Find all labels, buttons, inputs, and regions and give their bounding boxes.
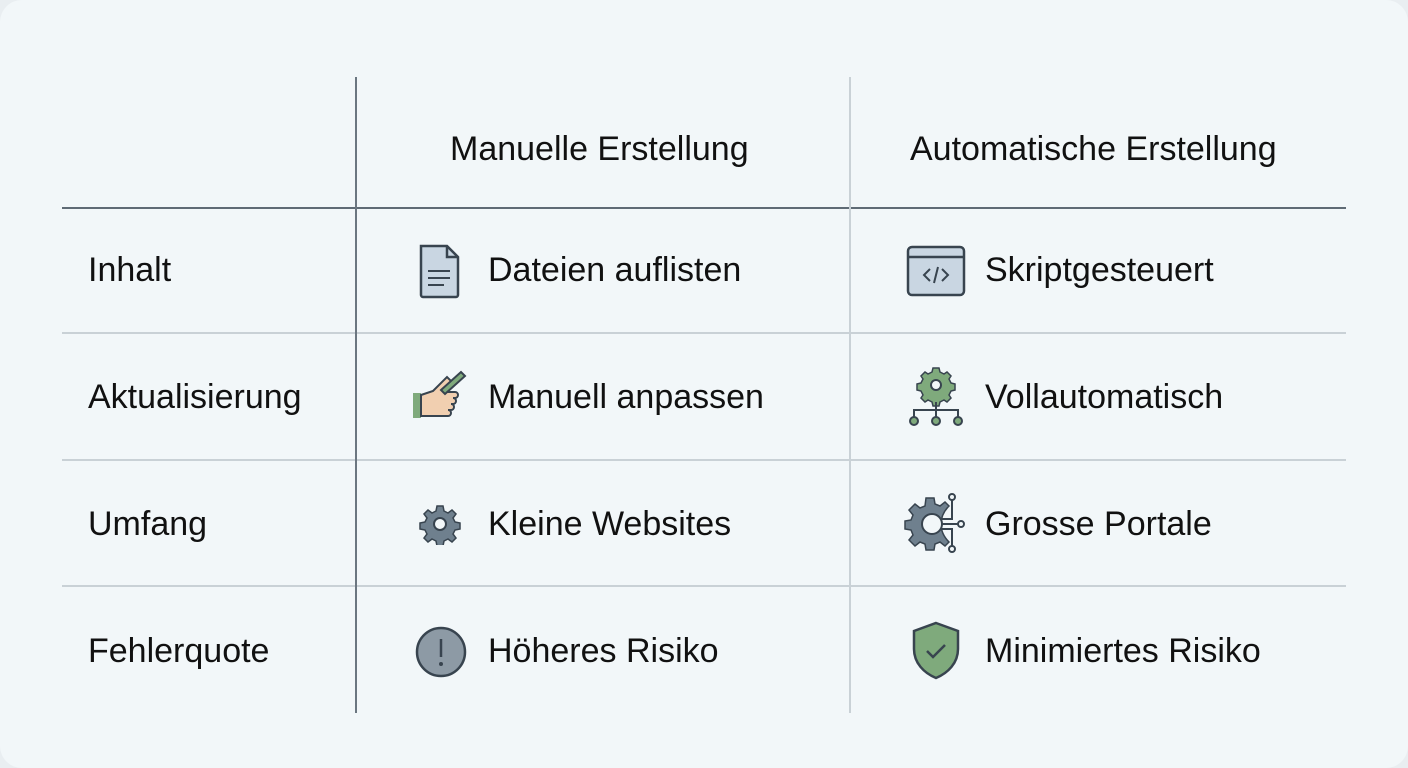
icon: exclamation circle bbox=[416, 626, 466, 678]
icon: small gear bbox=[419, 505, 461, 545]
row label: Umfang: Umfang bbox=[88, 505, 207, 543]
cell text: Dateien auflisten: Dateien auflisten bbox=[488, 251, 741, 289]
cell text: Grosse Portale: Grosse Portale bbox=[985, 505, 1212, 543]
cell text: Skriptgesteuert: Skriptgesteuert bbox=[985, 251, 1214, 289]
row label: Fehlerquote: Fehlerquote bbox=[88, 632, 269, 670]
icon: gear network bbox=[909, 367, 963, 426]
header: Automatische Erstellung: Automatische Erstellung bbox=[910, 130, 1277, 168]
header: Manuelle Erstellung: Manuelle Erstellung bbox=[450, 130, 749, 168]
cell text: Vollautomatisch: Vollautomatisch bbox=[985, 378, 1223, 416]
icon: document bbox=[420, 244, 460, 298]
icon: code window bbox=[906, 246, 966, 296]
icon: shield check bbox=[912, 622, 960, 680]
cell text: Minimiertes Risiko: Minimiertes Risiko bbox=[985, 632, 1261, 670]
cell text: Kleine Websites: Kleine Websites bbox=[488, 505, 731, 543]
cell text: Manuell anpassen: Manuell anpassen bbox=[488, 378, 764, 416]
row label: Aktualisierung: Aktualisierung bbox=[88, 378, 302, 416]
cell text: Höheres Risiko: Höheres Risiko bbox=[488, 632, 719, 670]
row label: Inhalt: Inhalt bbox=[88, 251, 171, 289]
icon: hand with pencil bbox=[413, 370, 466, 418]
icon: gear circuit bbox=[904, 493, 965, 553]
